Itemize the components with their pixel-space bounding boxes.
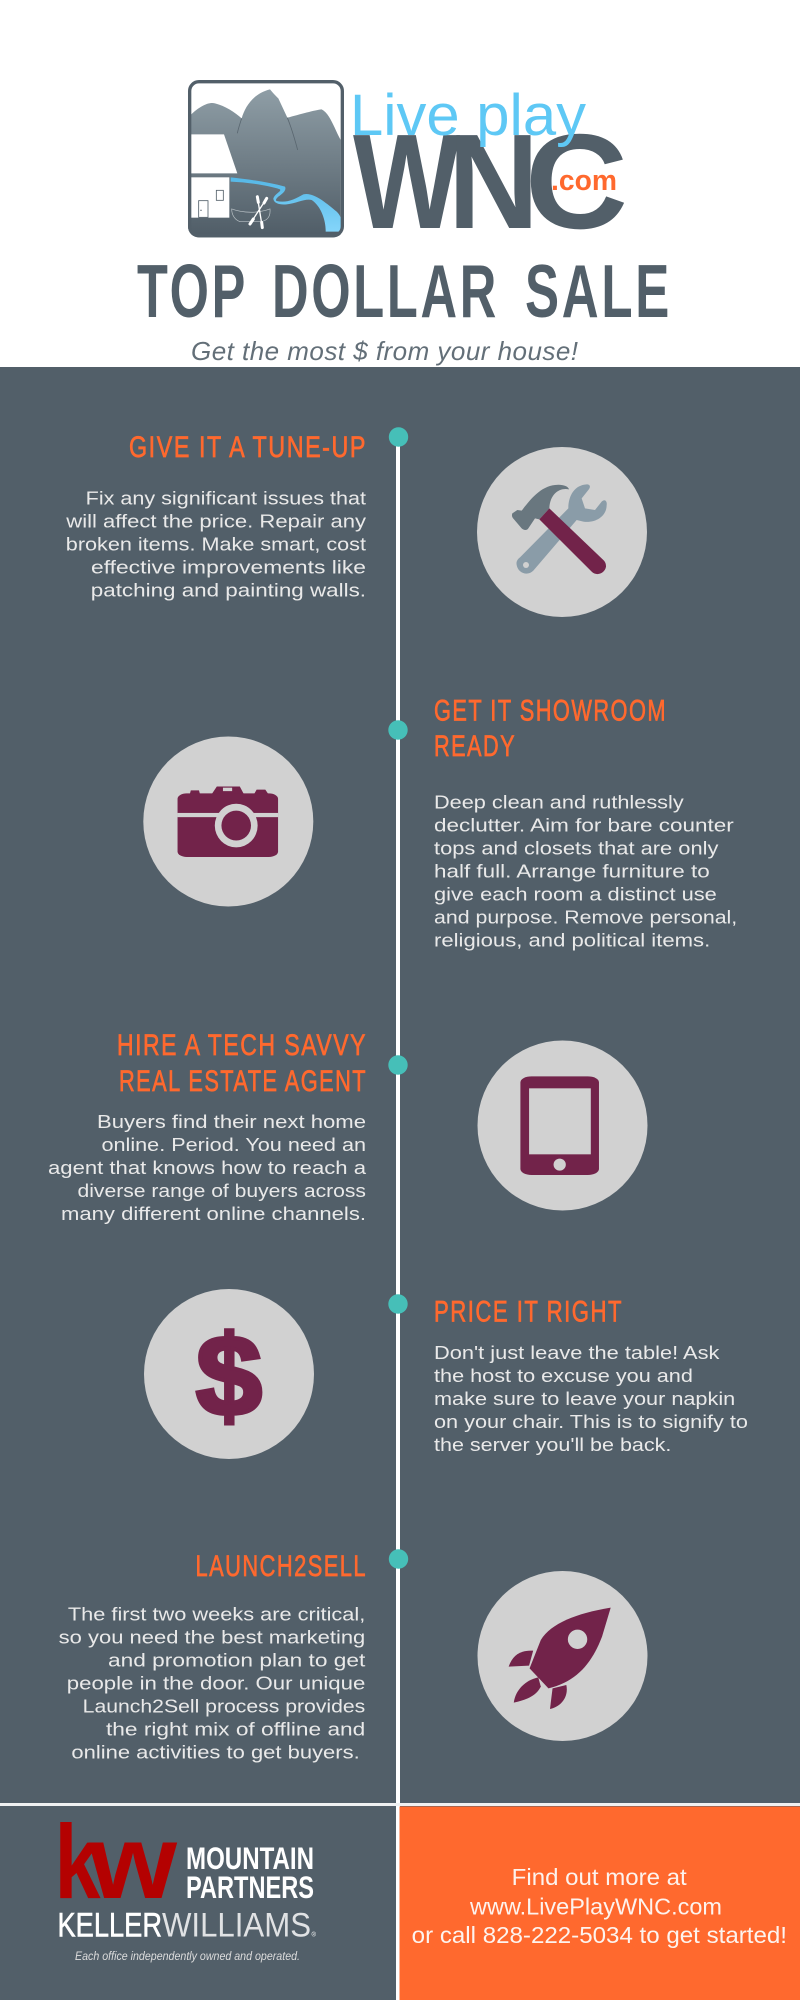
body text: patching and painting walls. xyxy=(91,580,366,600)
body text xyxy=(65,488,367,600)
body text: Launch2Sell process provides xyxy=(83,1696,365,1717)
body text: The first two weeks are critical, xyxy=(68,1604,365,1625)
title: TOP xyxy=(137,249,248,333)
heading: PRICE IT RIGHT xyxy=(434,1296,623,1329)
call to action text: Find out more at xyxy=(512,1864,687,1890)
subtitle: Get the most $ from your house! xyxy=(191,336,578,366)
Keller Williams wordmark: ® xyxy=(312,1932,316,1939)
timeline dot xyxy=(389,1549,408,1569)
heading xyxy=(434,694,667,763)
WNC wordmark: W xyxy=(353,106,460,257)
body text: and promotion plan to get xyxy=(108,1650,365,1671)
logo: Live Play WNC xyxy=(188,80,624,238)
body text xyxy=(59,1604,365,1763)
body text: Fix any significant issues that xyxy=(86,488,366,508)
kw mark xyxy=(54,1804,177,1921)
WNC wordmark: N xyxy=(448,106,539,257)
timeline dot xyxy=(388,1294,408,1314)
step 2: showroom ready xyxy=(143,694,737,950)
body text: many different online channels. xyxy=(61,1203,366,1224)
Mountain Partners: PARTNERS xyxy=(186,1869,314,1905)
timeline dot xyxy=(389,427,408,447)
body text xyxy=(434,791,737,950)
Mountain Partners xyxy=(186,1840,314,1905)
icon: camera xyxy=(143,736,313,906)
body text: will affect the price. Repair any xyxy=(65,510,367,532)
body text: declutter. Aim for bare counter xyxy=(434,814,734,835)
WNC wordmark xyxy=(353,106,628,257)
body text: effective improvements like xyxy=(91,556,366,578)
timeline dot xyxy=(388,720,408,740)
call to action text: www.LivePlayWNC.com xyxy=(469,1893,722,1919)
heading: REAL ESTATE AGENT xyxy=(119,1065,367,1098)
icon: mountain scene xyxy=(188,80,344,238)
body text: Buyers find their next home xyxy=(97,1111,366,1132)
timeline dot xyxy=(388,1055,408,1075)
heading xyxy=(117,1029,367,1098)
heading: GIVE IT A TUNE-UP xyxy=(129,431,367,464)
icon: rocket xyxy=(478,1571,648,1741)
Keller Williams wordmark xyxy=(58,1907,316,1945)
body text: diverse range of buyers across xyxy=(78,1180,366,1201)
heading: LAUNCH2SELL xyxy=(196,1550,367,1583)
body text: so you need the best marketing xyxy=(59,1627,365,1648)
.com wordmark: .com xyxy=(551,165,617,197)
icon: dollar sign xyxy=(144,1289,314,1459)
body text: Don't just leave the table! Ask xyxy=(434,1342,720,1363)
Live play wordmark: Live play xyxy=(350,83,586,148)
footer divider xyxy=(0,1803,800,1806)
title: DOLLAR xyxy=(272,249,499,333)
body text: on your chair. This is to signify to xyxy=(434,1411,748,1432)
heading: READY xyxy=(434,730,516,763)
body text xyxy=(48,1111,367,1224)
call to action text xyxy=(412,1864,787,1948)
body text xyxy=(434,1342,748,1455)
body text: the host to excuse you and xyxy=(434,1365,693,1386)
panel: Keller Williams logo xyxy=(54,1804,316,1963)
title xyxy=(137,249,672,333)
Mountain Partners: MOUNTAIN xyxy=(186,1840,314,1876)
icon: tablet xyxy=(478,1040,648,1210)
body text: give each room a distinct use xyxy=(434,883,717,904)
timeline line xyxy=(396,437,400,2000)
call to action text: or call 828-222-5034 to get started! xyxy=(412,1922,787,1948)
Keller Williams wordmark: KELLER xyxy=(58,1907,162,1945)
body text: half full. Arrange furniture to xyxy=(434,860,710,881)
body text: online activities to get buyers. xyxy=(71,1742,360,1763)
icon: dollar sign: $ xyxy=(196,1313,262,1440)
icon: hammer and wrench xyxy=(477,447,647,617)
body text: tops and closets that are only xyxy=(434,837,719,858)
body text: make sure to leave your napkin xyxy=(434,1388,735,1409)
body text: religious, and political items. xyxy=(434,929,710,950)
step 4: price it right xyxy=(144,1289,748,1459)
body text: and purpose. Remove personal, xyxy=(434,906,737,927)
body text: broken items. Make smart, cost xyxy=(66,534,366,554)
body text: Deep clean and ruthlessly xyxy=(434,791,685,812)
step 1: tune-up xyxy=(65,427,647,617)
body text: online. Period. You need an xyxy=(102,1134,366,1155)
body text: the server you'll be back. xyxy=(434,1434,671,1455)
heading: HIRE A TECH SAVVY xyxy=(117,1029,367,1062)
body text: people in the door. Our unique xyxy=(67,1673,365,1694)
step 3: tech savvy agent xyxy=(48,1029,648,1224)
title: SALE xyxy=(525,249,672,333)
step 5: Launch2Sell xyxy=(59,1549,647,1763)
heading: GET IT SHOWROOM xyxy=(434,694,667,728)
kw mark: k xyxy=(54,1804,101,1921)
disclaimer: Each office independently owned and operated. xyxy=(75,1951,300,1963)
WNC wordmark: C xyxy=(525,106,628,257)
Keller Williams wordmark: WILLIAMS xyxy=(162,1907,311,1945)
kw mark: w xyxy=(88,1804,177,1921)
body text: the right mix of offline and xyxy=(106,1719,365,1740)
body text: agent that knows how to reach a xyxy=(48,1157,367,1178)
panel: call to action xyxy=(400,1806,800,2000)
